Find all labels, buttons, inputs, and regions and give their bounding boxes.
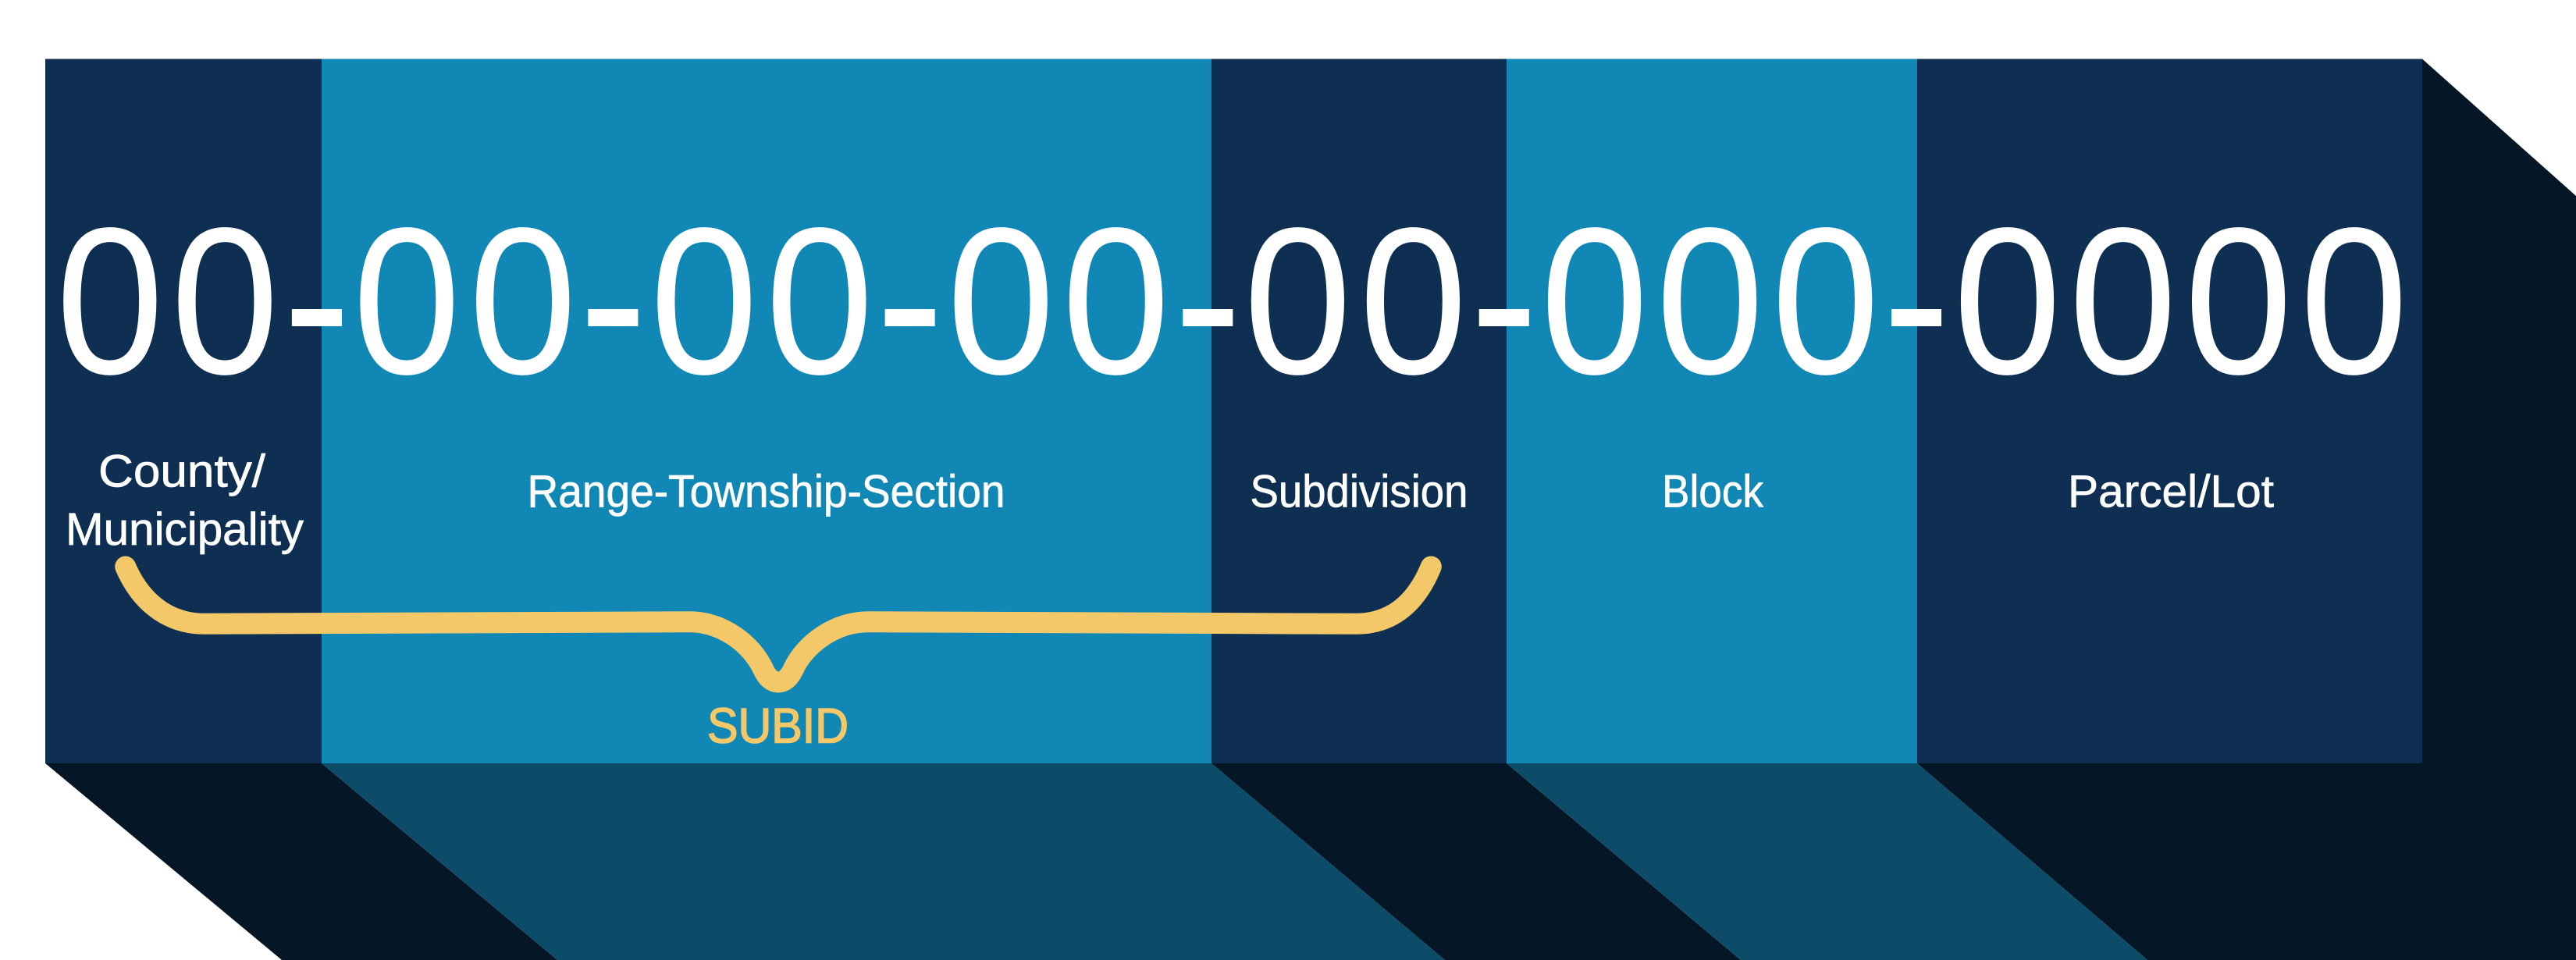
bottom face: block [1507,763,2147,960]
bottom face: parcel [1917,763,2422,960]
curly brace: SUBID span [126,567,1431,682]
parcel number digits: - [283,176,351,423]
bottom face: range-township-section [322,763,1445,960]
parcel number digits: 00 [650,184,873,418]
parcel number digits: - [579,176,647,423]
side face: right extrusion [2422,59,2576,960]
label: parcel/lot: Parcel/Lot [2068,467,2274,517]
panel: county/municipality [45,59,322,763]
bottom face: subdivision [1212,763,1741,960]
label: county/municipality [66,446,304,555]
panel: range-township-section [322,59,1212,763]
parcel number digits: - [1882,176,1951,423]
parcel number digits: 00 [947,184,1170,418]
panel: subdivision [1212,59,1507,763]
parcel number digits: 00 [55,184,279,418]
panel: block [1507,59,1917,763]
label: county/municipality: County/ [98,446,266,496]
label: subdivision: Subdivision [1251,467,1468,517]
panel: parcel/lot [1917,59,2422,763]
parcel number digits: 00 [353,184,577,418]
label: SUBID: SUBID [707,699,849,754]
parcel number digits: 00 [1244,184,1468,418]
parcel number digits: 0000 [1953,184,2408,418]
parcel number digits: 000 [1540,184,1880,418]
parcel number digits: - [1470,176,1538,423]
label: county/municipality: Municipality [66,504,304,555]
label: block: Block [1662,467,1764,517]
bottom face: county [45,763,557,960]
parcel number digits: - [876,176,944,423]
label: range-township-section: Range-Township-Section [528,467,1005,517]
parcel number digits: - [1174,176,1242,423]
